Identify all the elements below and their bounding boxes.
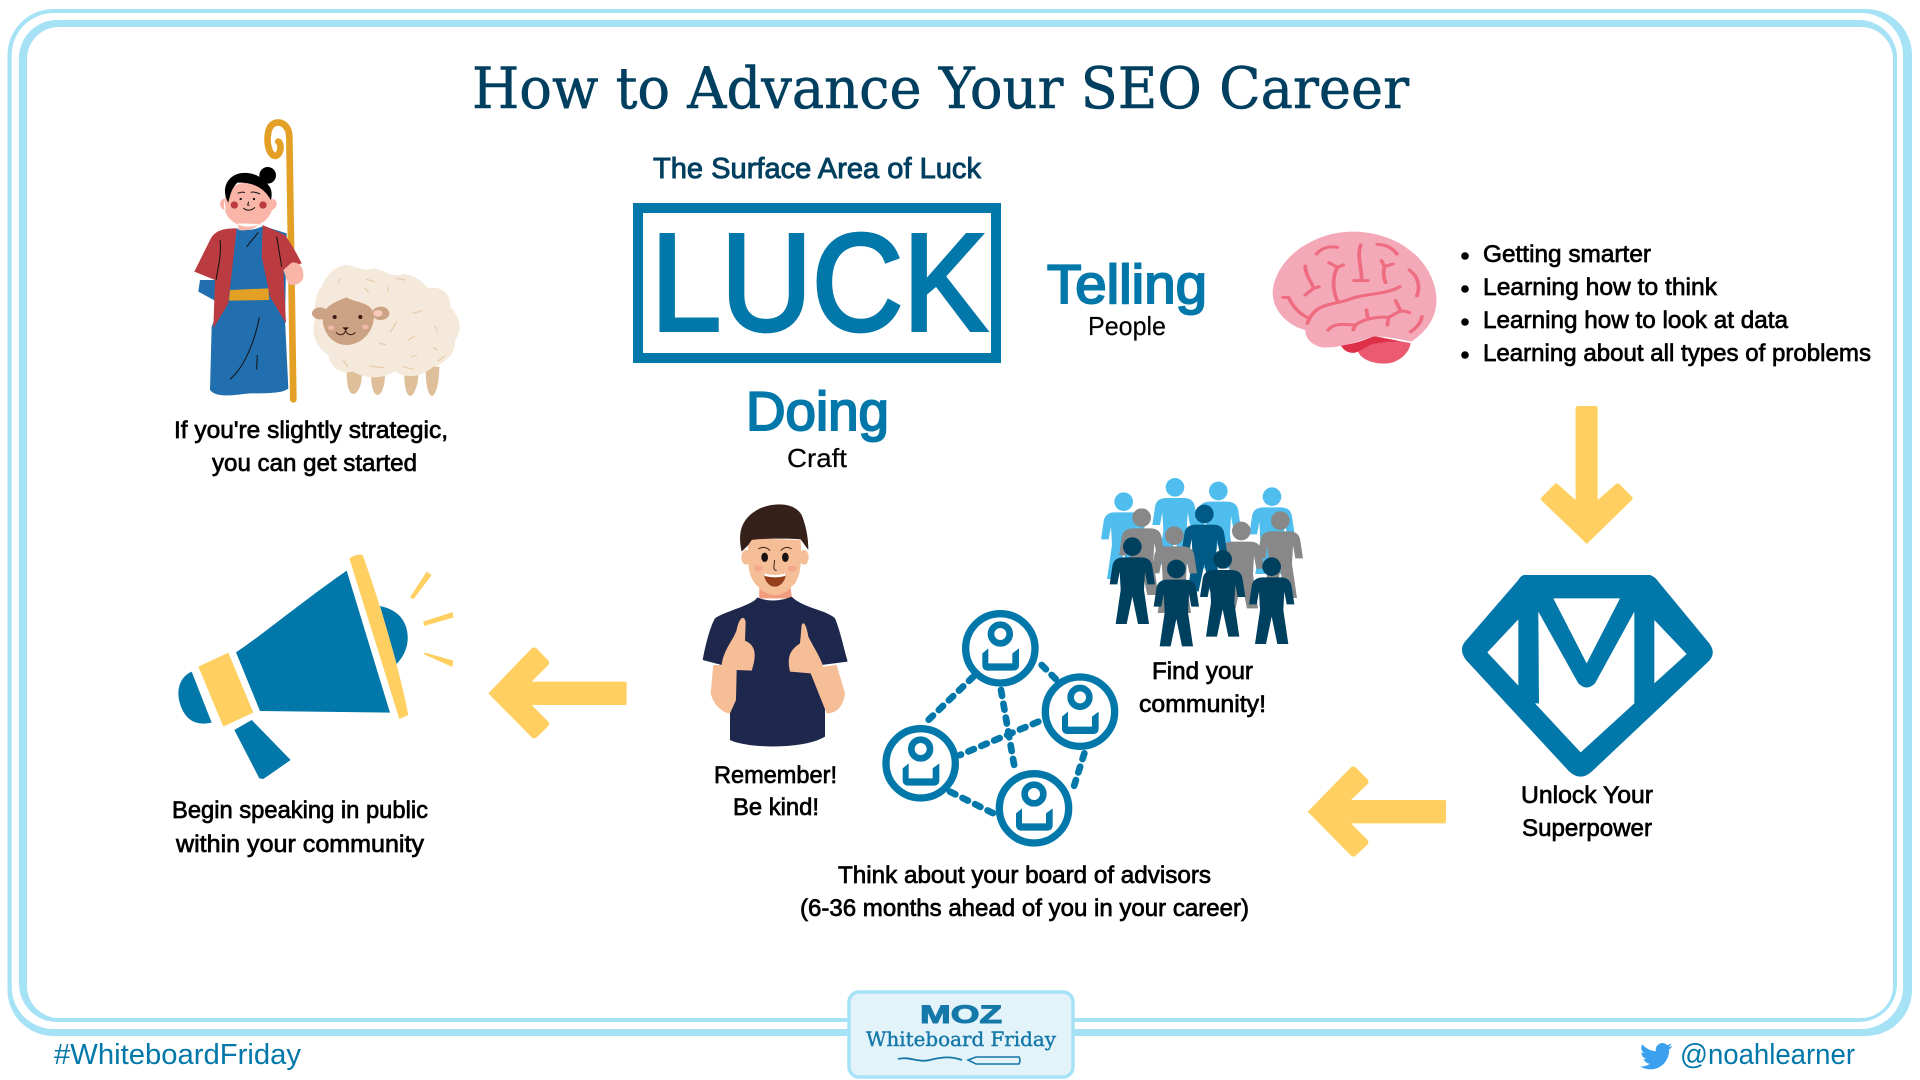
wool tufts [338, 278, 445, 369]
icon: thumbs up man [703, 504, 848, 746]
robe folds [216, 232, 282, 379]
dashed links [927, 665, 1084, 813]
light blue people [1101, 478, 1295, 579]
bullet list: getting smarter: Learning how to think [1483, 274, 1718, 301]
caption: superpower: Superpower [1522, 815, 1652, 842]
eyes [761, 553, 768, 562]
caption: community: community! [1139, 691, 1266, 718]
label: doing craft: Doing [746, 380, 889, 442]
head [748, 538, 801, 592]
bullet list: getting smarter: Getting smarter [1483, 241, 1651, 268]
icon: superpower diamond [1462, 575, 1713, 777]
arrow: left upper [488, 647, 627, 738]
caption: board of advisors [800, 862, 1249, 922]
caption: shepherd: you can get started [212, 450, 417, 477]
arms and thumbs [711, 618, 755, 713]
bullet list: getting smarter [1461, 241, 1871, 367]
dark navy people [1110, 537, 1294, 646]
label: telling people [1047, 253, 1207, 341]
caption: board of advisors: Think about your board of advisors [838, 862, 1211, 889]
cheeks [231, 201, 238, 209]
icon: brain [1273, 232, 1437, 364]
caption: shepherd [174, 417, 448, 477]
shirt [703, 597, 848, 746]
heading: surface area of luck: The Surface Area of Luck [653, 153, 981, 185]
sheep face [323, 297, 374, 345]
bullet list: getting smarter: Learning about all types of problems [1483, 340, 1871, 367]
shepherd jacket [194, 225, 302, 328]
arrow: left lower [1308, 766, 1446, 857]
sheep ears [312, 307, 328, 319]
icon: twitter bird [1640, 1043, 1672, 1069]
label: telling people: People [1088, 311, 1166, 341]
grey people and mid blue person [1119, 505, 1303, 613]
caption: superpower: Unlock Your [1521, 782, 1653, 809]
sheep wool [313, 265, 460, 377]
luck box: LUCK [651, 206, 987, 360]
icon: megaphone [178, 555, 453, 779]
moz whiteboard friday badge: Whiteboard Friday [866, 1027, 1057, 1051]
mouth [764, 574, 786, 587]
neck [759, 580, 792, 598]
advisor nodes [886, 614, 1115, 843]
face details [238, 192, 260, 210]
hashtag: #WhiteboardFriday [54, 1039, 302, 1071]
label: doing craft: Craft [787, 443, 848, 473]
ears and head [220, 183, 277, 230]
caption: community [1139, 658, 1266, 718]
caption: shepherd: If you're slightly strategic, [174, 417, 448, 444]
hand [283, 263, 303, 285]
icon: shepherd with sheep [194, 122, 460, 399]
caption: superpower [1521, 782, 1653, 842]
label: telling people: Telling [1047, 253, 1207, 315]
moz whiteboard friday badge [849, 992, 1073, 1077]
hair [740, 504, 808, 552]
caption: be kind [714, 762, 837, 821]
caption: megaphone: within your community [175, 831, 424, 858]
caption: be kind: Be kind! [733, 794, 819, 821]
title: How to Advance Your SEO Career [472, 56, 1410, 122]
caption: be kind: Remember! [714, 762, 837, 789]
icon: advisor network [886, 614, 1115, 843]
caption: megaphone: Begin speaking in public [172, 797, 428, 824]
sheep legs [347, 367, 439, 396]
caption: board of advisors: (6-36 months ahead of you in your career) [800, 895, 1249, 922]
shepherd staff [268, 122, 293, 399]
twitter handle: @noahlearner [1680, 1039, 1855, 1071]
shepherd robe [198, 226, 288, 395]
icon: community crowd [1101, 478, 1303, 646]
caption: community: Find your [1152, 658, 1253, 685]
label: doing craft [746, 380, 889, 473]
belt [229, 288, 269, 301]
ears [741, 550, 751, 565]
arrow: down [1541, 406, 1633, 544]
bullet list: getting smarter: Learning how to look at data [1483, 307, 1789, 334]
cheeks [754, 565, 763, 571]
caption: megaphone [172, 797, 428, 858]
moz whiteboard friday badge: MOZ [920, 1001, 1002, 1029]
hair [225, 173, 272, 203]
